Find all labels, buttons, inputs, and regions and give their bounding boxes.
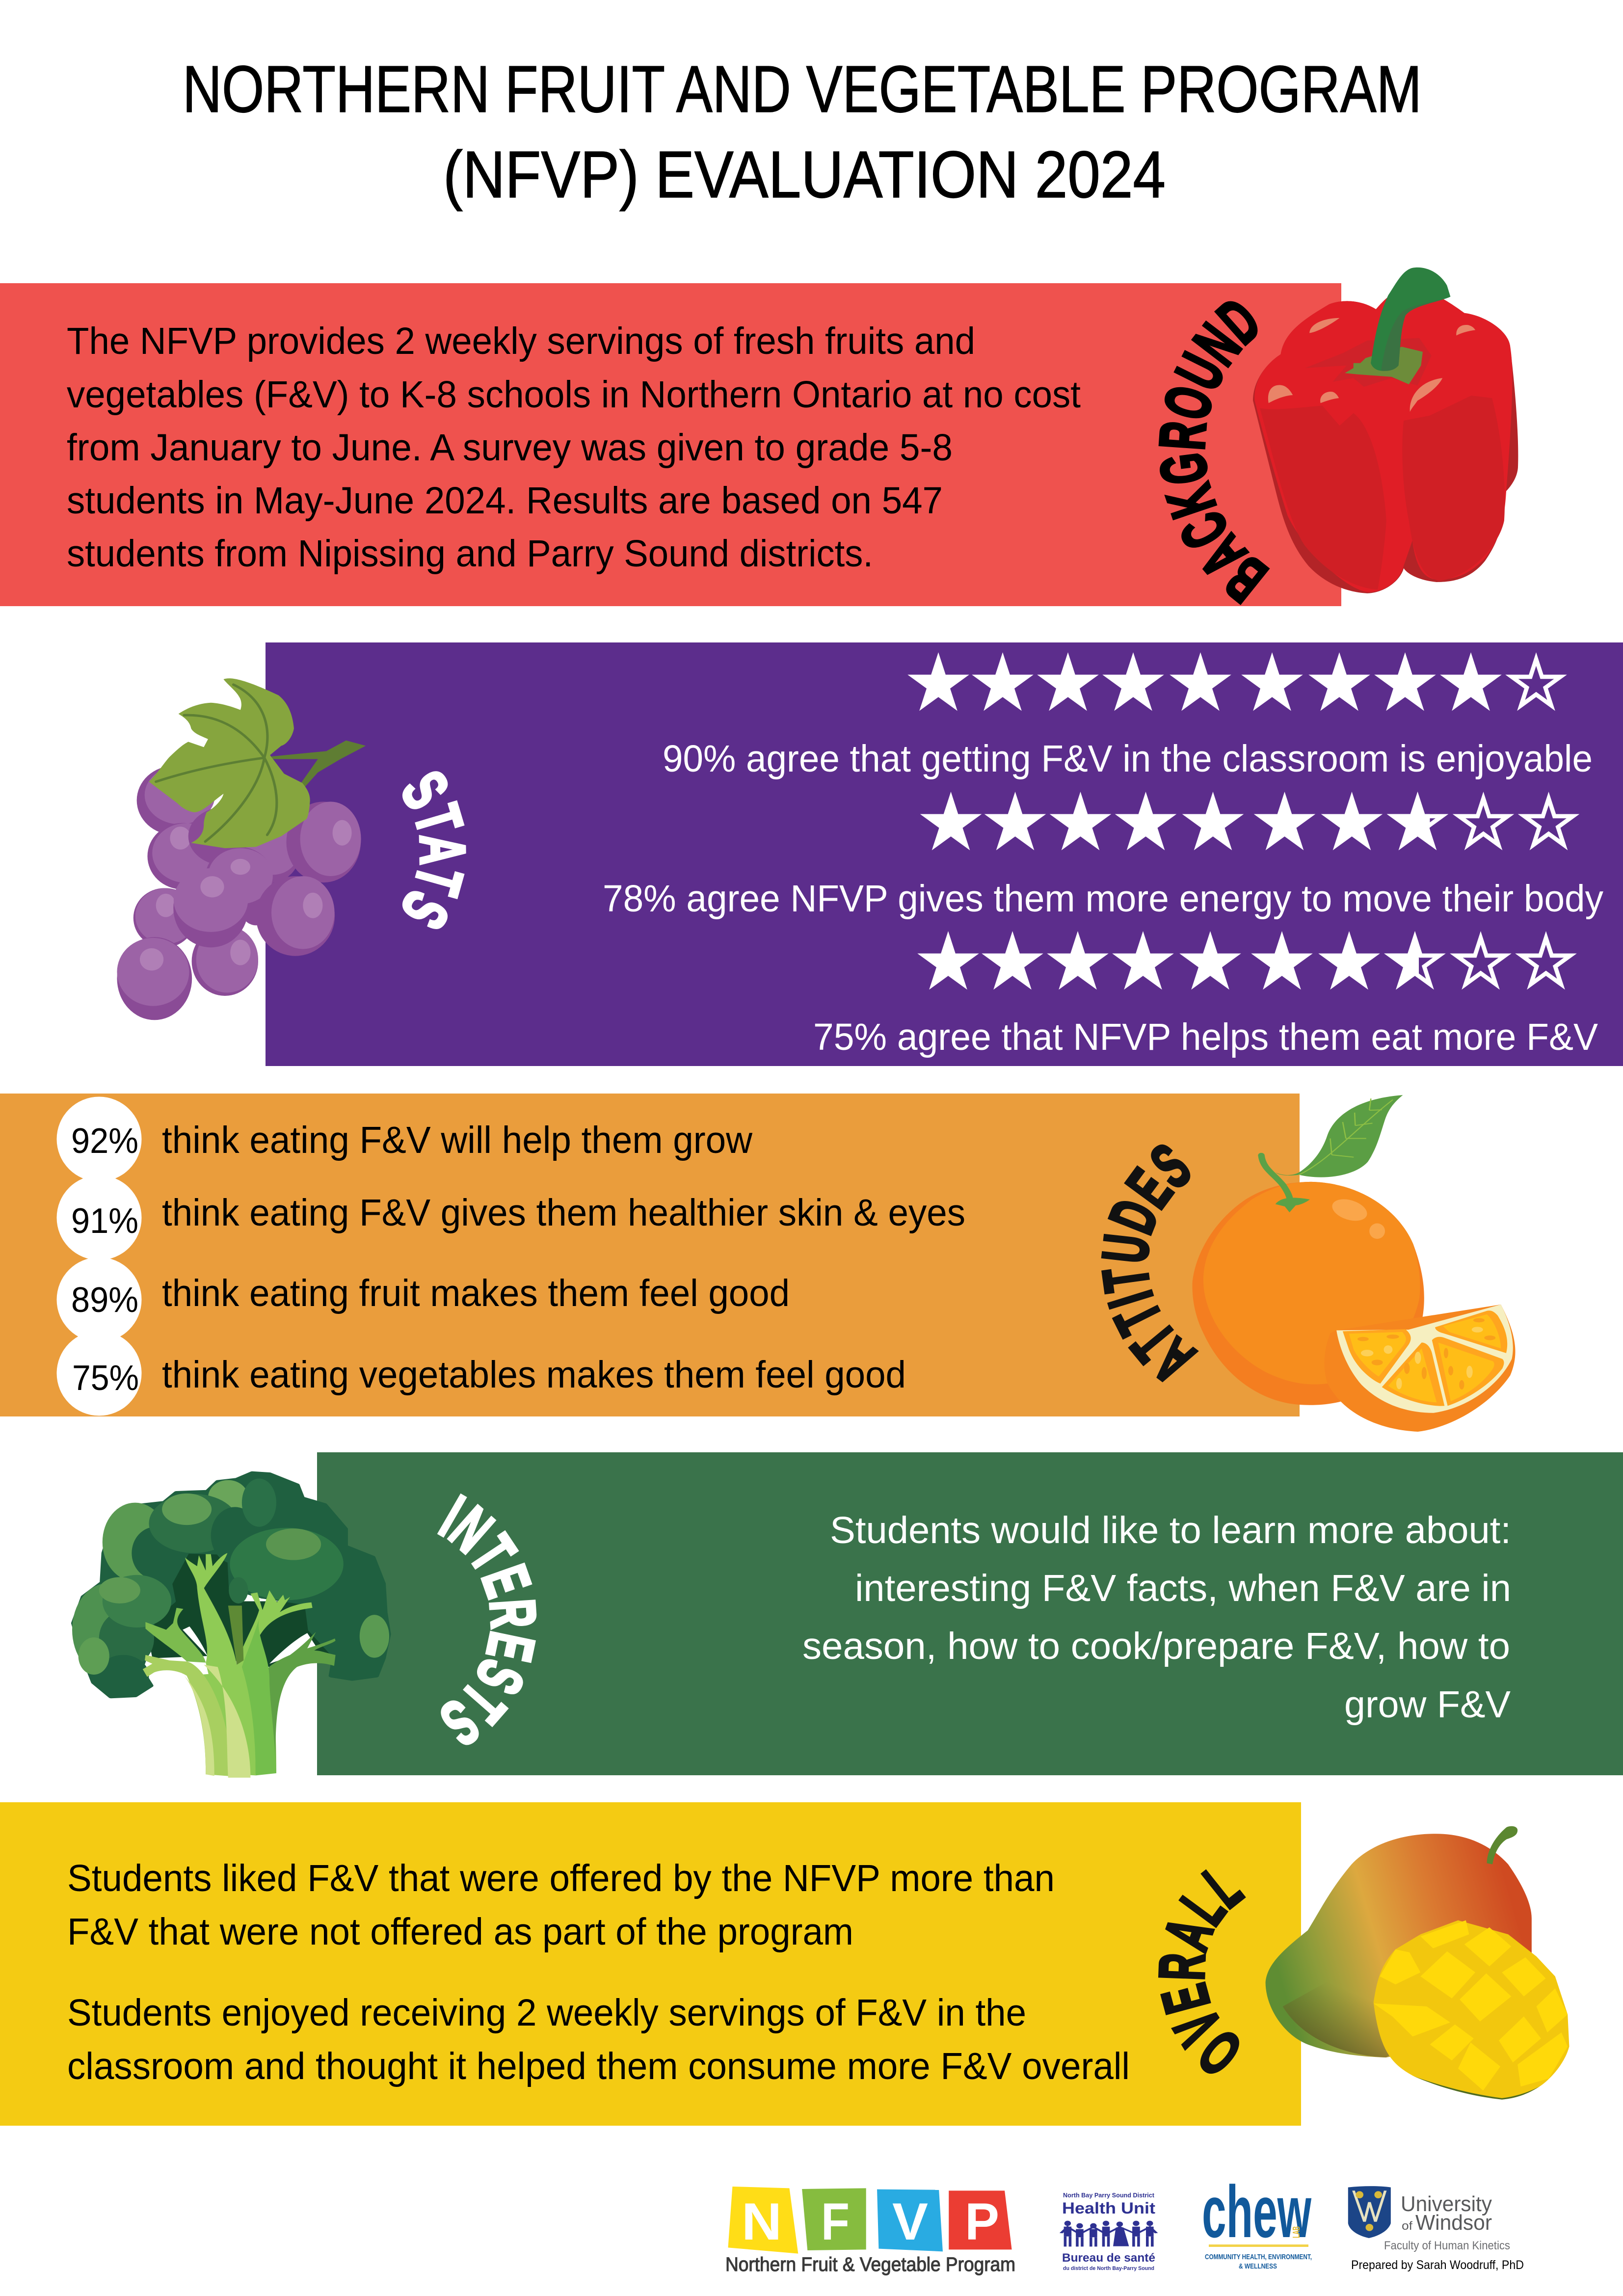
logo: health unit: Bureau de santé [1062, 2251, 1155, 2265]
background text: students from Nipissing and Parry Sound districts. [67, 533, 873, 575]
stat text: 78%: 78% agree NFVP gives them more energy to move their body [603, 878, 1603, 920]
panel: overall [0, 1802, 1570, 2126]
interests text: Students would like to learn more about: [830, 1509, 1511, 1551]
logo: health unit [1061, 2191, 1156, 2271]
background text: The NFVP provides 2 weekly servings of fresh fruits and [67, 320, 975, 362]
attitude statements: think eating F&V gives them healthier skin & eyes [162, 1192, 965, 1234]
overall text: Students liked F&V that were offered by the NFVP more than [67, 1857, 1055, 1899]
logo: chew lab: LAB [1291, 2226, 1302, 2238]
overall text [67, 1857, 1130, 2087]
logo: health unit: Health Unit [1062, 2199, 1155, 2217]
title: (NFVP) EVALUATION 2024 [443, 137, 1166, 212]
icon: orange [1192, 1095, 1516, 1432]
interests text: season, how to cook/prepare F&V, how to [802, 1625, 1510, 1667]
logo: university of windsor: Windsor [1415, 2211, 1492, 2235]
heading: stats: STATS [402, 771, 466, 929]
percentage circles: 75% [72, 1359, 139, 1398]
interests text [802, 1509, 1511, 1726]
overall text: classroom and thought it helped them consume more F&V overall [67, 2045, 1130, 2087]
icon: mango [1266, 1826, 1569, 2100]
heading: overall: OVERALL [1158, 1869, 1246, 2074]
panel: interests [71, 1452, 1623, 1778]
attitude statements: think eating fruit makes them feel good [162, 1272, 790, 1314]
background text: students in May-June 2024. Results are based on 547 [67, 480, 943, 522]
interests text: interesting F&V facts, when F&V are in [855, 1567, 1511, 1609]
title [183, 52, 1422, 212]
logo: university of windsor [1348, 2186, 1510, 2252]
heading: background: BACKGROUND [1158, 301, 1270, 605]
background text [67, 320, 1081, 575]
panel: stats [117, 642, 1623, 1066]
background text: from January to June. A survey was given to grade 5-8 [67, 427, 953, 469]
logo: university of windsor: Faculty of Human Kinetics [1384, 2239, 1510, 2252]
attitude statements: think eating vegetables makes them feel good [162, 1354, 906, 1396]
percentage circles: 92% [71, 1121, 138, 1161]
logo: chew lab: chew [1202, 2170, 1311, 2253]
icon: red pepper [1253, 267, 1518, 593]
logo: university of windsor: of [1402, 2219, 1412, 2233]
overall text: F&V that were not offered as part of the program [67, 1911, 853, 1953]
percentage circles [57, 1096, 141, 1415]
logo: NFVP: P [965, 2192, 999, 2251]
background text: vegetables (F&V) to K-8 schools in Northern Ontario at no cost [67, 374, 1081, 416]
logo: health unit: du district de North Bay-Parry Sound [1063, 2266, 1154, 2271]
logo: chew lab: COMMUNITY HEALTH, ENVIRONMENT, [1205, 2253, 1312, 2261]
logo: chew lab: & WELLNESS [1239, 2262, 1277, 2270]
stat text: 75%: 75% agree that NFVP helps them eat more F&V [813, 1016, 1598, 1058]
stat text: 90%: 90% agree that getting F&V in the classroom is enjoyable [663, 738, 1593, 780]
logo: chew lab [1202, 2170, 1312, 2270]
panel: background [0, 267, 1518, 606]
star rating: 78% [920, 792, 1579, 850]
overall text: Students enjoyed receiving 2 weekly servings of F&V in the [67, 1992, 1026, 2034]
logo: university of windsor: University [1401, 2192, 1492, 2216]
logo: NFVP: Northern Fruit & Vegetable Program [725, 2254, 1015, 2275]
logo: NFVP: V [892, 2192, 928, 2251]
panel: attitudes [0, 1094, 1516, 1432]
logo: NFVP [725, 2187, 1015, 2275]
interests text: grow F&V [1344, 1683, 1511, 1726]
attitude statements: think eating F&V will help them grow [162, 1119, 752, 1161]
icon: broccoli [72, 1473, 389, 1778]
credit line: Prepared by Sarah Woodruff, PhD [1351, 2258, 1524, 2272]
logo: NFVP: N [742, 2192, 782, 2251]
logo: NFVP: F [821, 2192, 850, 2251]
heading: interests: INTERESTS [437, 1493, 537, 1745]
percentage circles: 91% [71, 1201, 138, 1241]
logo: health unit: North Bay Parry Sound District [1063, 2191, 1155, 2199]
icon: grapes [117, 678, 366, 1020]
star rating: 90% [907, 652, 1567, 711]
percentage circles: 89% [71, 1281, 138, 1320]
star rating: 75% [917, 931, 1577, 989]
heading: attitudes: ATTITUDES [1101, 1145, 1199, 1382]
attitude statements [162, 1119, 965, 1396]
